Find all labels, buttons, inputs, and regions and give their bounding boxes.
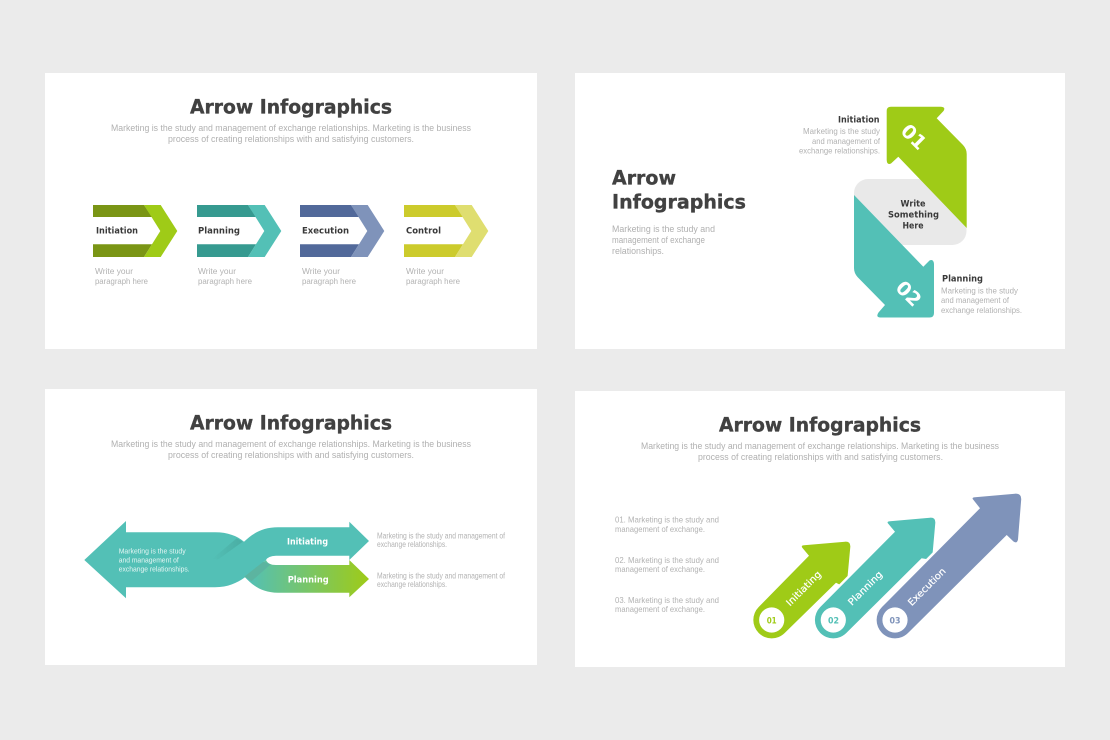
label: Initiation: exchange relationships. <box>799 146 880 156</box>
caption 2: paragraph here <box>198 276 252 286</box>
label: Initiation: Initiation <box>838 116 880 126</box>
title <box>612 166 746 214</box>
caption 1: Write your <box>95 266 133 276</box>
caption 1: paragraph here <box>95 276 148 286</box>
arrow 02 teal: 02 <box>828 616 839 626</box>
title: Infographics <box>612 190 746 214</box>
arrow 03 blue <box>877 494 1021 638</box>
arrow 03 blue: Execution <box>906 566 948 608</box>
label: Planning <box>941 274 1022 315</box>
caption 3: Write your <box>302 266 340 276</box>
center text: Here <box>902 222 924 232</box>
panel: opposing arrows <box>575 73 1065 349</box>
caption 3 <box>302 266 356 286</box>
list item 02 <box>615 555 719 574</box>
text: Planning: exchange relationships. <box>377 579 447 589</box>
subtitle: Marketing is the study and management of exchange relationships. Marketing is the business <box>111 439 471 450</box>
text: Planning: Marketing is the study and management of <box>377 571 505 581</box>
label: Initiation: Marketing is the study <box>803 126 881 136</box>
arrow: Planning: Planning <box>288 576 329 586</box>
center text: Something <box>888 211 939 221</box>
chevron: Planning: Planning <box>198 226 240 236</box>
caption 2 <box>198 266 252 286</box>
arrow 01 green: 01 <box>896 120 931 155</box>
title: Arrow Infographics <box>190 412 392 434</box>
chevron: Planning <box>197 205 281 257</box>
chevron: Execution: Execution <box>302 226 349 236</box>
list item 03: 03. Marketing is the study and <box>615 595 719 605</box>
arrow 01 green: 01 <box>767 616 777 626</box>
center text: Write <box>900 200 926 210</box>
list item 01 <box>615 514 719 534</box>
caption 3: paragraph here <box>302 276 356 286</box>
arrow 03 blue: 03 <box>890 616 900 626</box>
text: Initiating: Marketing is the study and management of <box>377 531 505 541</box>
arrow 01 green <box>753 542 850 638</box>
list item 01: management of exchange. <box>615 524 705 534</box>
chevron: Control: Control <box>406 226 441 236</box>
arrow 02 teal: 02 <box>891 277 926 311</box>
list item 01: 01. Marketing is the study and <box>615 514 719 524</box>
arrow: left and Initiating: Initiating <box>287 538 328 548</box>
description: Marketing is the study and <box>612 224 715 235</box>
subtitle <box>641 441 999 463</box>
description <box>612 224 715 257</box>
caption 4: Write your <box>406 266 444 276</box>
center grey box <box>854 179 966 245</box>
label: Planning: exchange relationships. <box>941 305 1022 315</box>
list item 03 <box>615 595 719 614</box>
label: Initiation <box>799 116 881 156</box>
panel: chevron process <box>45 73 537 349</box>
caption 2: Write your <box>198 266 236 276</box>
twist shadows <box>212 538 271 581</box>
arrow: left and Initiating: Marketing is the study <box>119 546 186 556</box>
caption 4 <box>406 266 460 286</box>
panel: rising arrows <box>575 391 1065 667</box>
subtitle: Marketing is the study and management of exchange relationships. Marketing is the business <box>111 123 471 134</box>
list item 03: management of exchange. <box>615 604 705 614</box>
chevron: Initiation: Initiation <box>96 226 138 236</box>
text: Initiating <box>377 531 505 549</box>
caption 4: paragraph here <box>406 276 460 286</box>
caption 1 <box>95 266 148 286</box>
chevron: Execution <box>300 205 384 257</box>
label: Initiation: and management of <box>812 136 881 146</box>
subtitle: process of creating relationships with and satisfying customers. <box>168 450 414 461</box>
chevron: Control <box>404 205 488 257</box>
subtitle: Marketing is the study and management of exchange relationships. Marketing is the business <box>641 441 999 452</box>
arrow: Planning <box>245 560 369 597</box>
arrow: left and Initiating <box>84 521 369 598</box>
description: management of exchange <box>612 235 705 246</box>
title: Arrow Infographics <box>719 414 921 436</box>
arrow 02 teal: Planning <box>846 569 885 608</box>
panel: twisted arrows <box>45 389 537 665</box>
subtitle: process of creating relationships with and satisfying customers. <box>698 452 943 463</box>
text: Planning <box>377 571 505 589</box>
arrow 01 green <box>887 107 967 228</box>
list item 02: management of exchange. <box>615 564 705 574</box>
subtitle <box>111 123 471 145</box>
subtitle: process of creating relationships with and satisfying customers. <box>168 134 414 145</box>
arrow 01 green: Initiating <box>784 569 824 609</box>
subtitle <box>111 439 471 461</box>
title: Arrow <box>612 166 676 190</box>
text: Initiating: exchange relationships. <box>377 539 447 549</box>
list item 02: 02. Marketing is the study and <box>615 555 719 565</box>
arrow: left and Initiating: exchange relationships. <box>119 564 190 573</box>
arrow 02 teal <box>854 195 934 318</box>
title: Arrow Infographics <box>190 96 392 118</box>
label: Planning: Marketing is the study <box>941 286 1019 296</box>
arrow 02 teal <box>815 518 935 638</box>
arrow: left and Initiating: and management of <box>119 555 179 564</box>
label: Planning: Planning <box>942 274 983 284</box>
center text <box>888 200 939 232</box>
chevron: Initiation <box>93 205 177 257</box>
label: Planning: and management of <box>941 295 1010 305</box>
description: relationships. <box>612 246 664 257</box>
